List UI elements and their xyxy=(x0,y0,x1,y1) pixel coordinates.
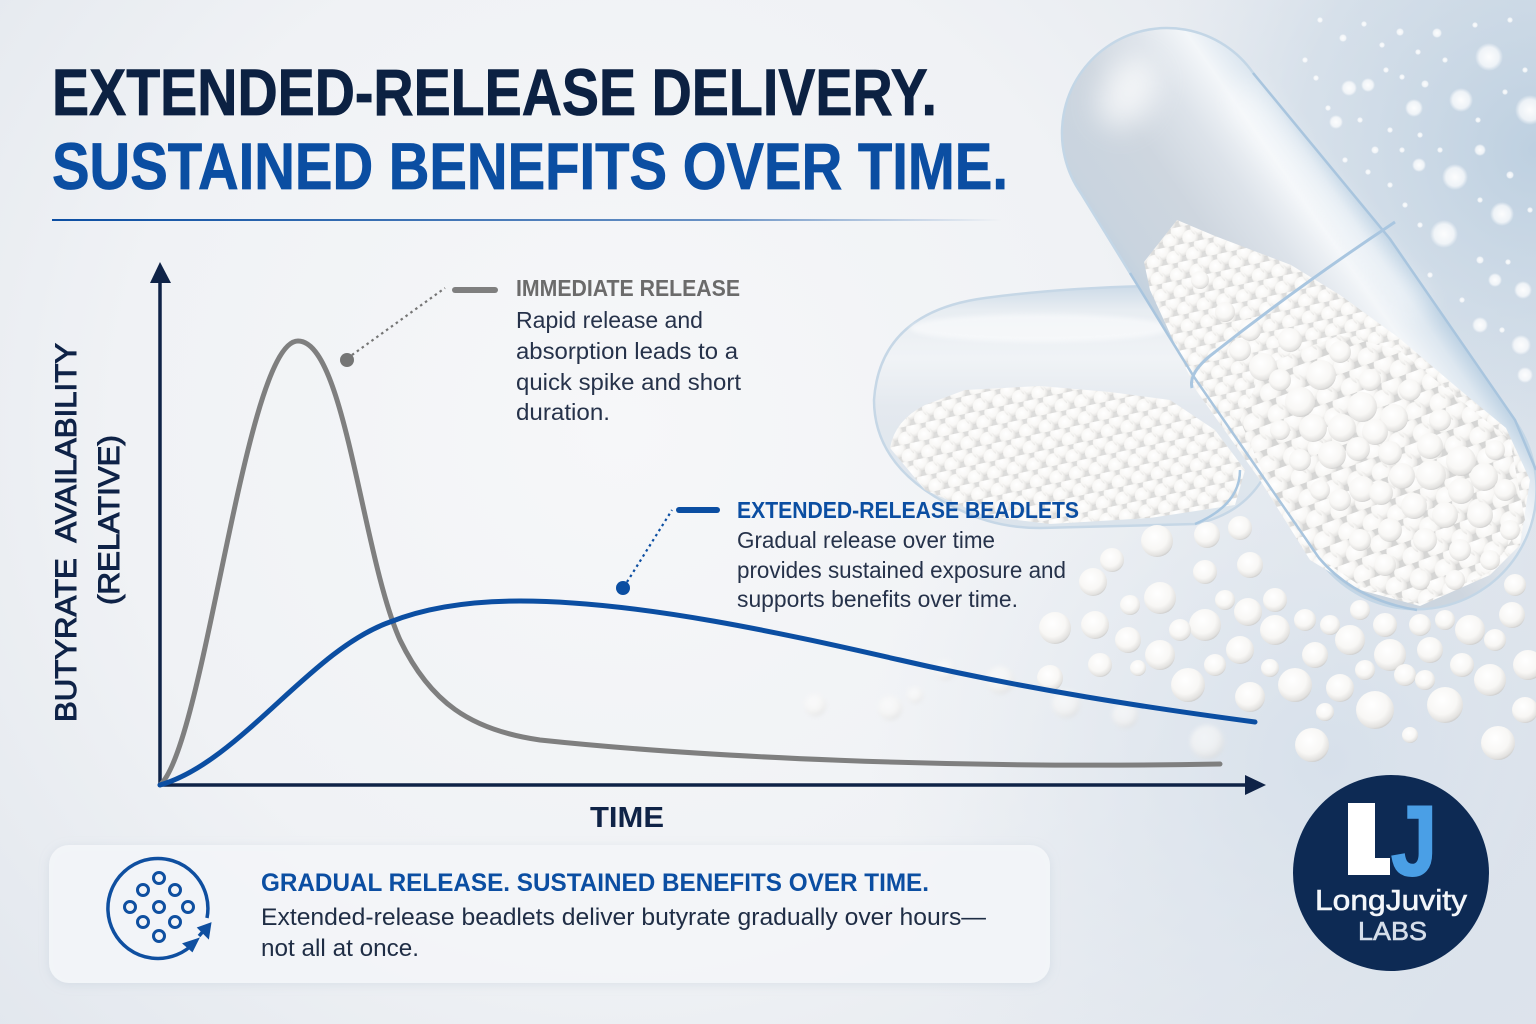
callout: extended-release beadlets xyxy=(616,497,1079,612)
callout: immediate release: duration. xyxy=(516,399,610,425)
logo: LongJuvity Labs: LongJuvity xyxy=(1315,885,1468,917)
callout: extended-release beadlets: EXTENDED-RELEASE BEADLETS xyxy=(737,497,1079,523)
extended release curve xyxy=(160,601,1255,785)
title xyxy=(52,55,1008,203)
title: SUSTAINED BENEFITS OVER TIME. xyxy=(52,129,1008,203)
y axis label: BUTYRATE AVAILABILITY xyxy=(50,343,83,722)
card body text xyxy=(261,904,986,962)
callout: immediate release: absorption leads to a xyxy=(516,338,739,364)
chart: butyrate availability over time xyxy=(50,262,1266,834)
panel: summary card xyxy=(49,845,1050,983)
capsule edges xyxy=(1130,73,1536,610)
callout: immediate release: quick spike and short xyxy=(516,369,741,395)
card body text: not all at once. xyxy=(261,935,419,962)
callout: immediate release xyxy=(340,275,741,425)
logo: LongJuvity Labs: J xyxy=(1391,785,1437,896)
y axis label: (RELATIVE) xyxy=(93,435,126,605)
card body text: Extended-release beadlets deliver butyrate gradually over hours— xyxy=(261,904,986,931)
immediate release curve xyxy=(160,341,1220,785)
title: EXTENDED-RELEASE DELIVERY. xyxy=(52,55,937,129)
callout: extended-release beadlets: supports benefits over time. xyxy=(737,586,1018,612)
beadlets in back capsule xyxy=(890,386,1245,524)
logo: LongJuvity Labs xyxy=(1293,775,1489,971)
logo: LongJuvity Labs: L xyxy=(1344,785,1392,896)
callout: extended-release beadlets: Gradual release over time xyxy=(737,527,995,553)
y axis label xyxy=(50,343,126,722)
callout: immediate release: IMMEDIATE RELEASE xyxy=(516,275,740,301)
capsule collar band xyxy=(1191,222,1395,388)
beadlets in front capsule xyxy=(1144,220,1530,606)
capsule: front capsule with beadlets xyxy=(1008,0,1536,656)
callout: extended-release beadlets: provides sustained exposure and xyxy=(737,557,1066,583)
card heading: GRADUAL RELEASE. SUSTAINED BENEFITS OVER TIME. xyxy=(261,869,929,897)
loose beadlets on surface xyxy=(804,516,1536,762)
y axis xyxy=(150,262,171,786)
capsule: back capsule with beadlets xyxy=(874,286,1262,528)
icon: beadlets with release arrows xyxy=(108,858,210,958)
logo: LongJuvity Labs: LABS xyxy=(1358,916,1427,946)
x axis label: TIME xyxy=(590,802,664,834)
floating beads particles xyxy=(1302,17,1536,383)
callout: immediate release: Rapid release and xyxy=(516,307,703,333)
x axis xyxy=(158,775,1266,795)
